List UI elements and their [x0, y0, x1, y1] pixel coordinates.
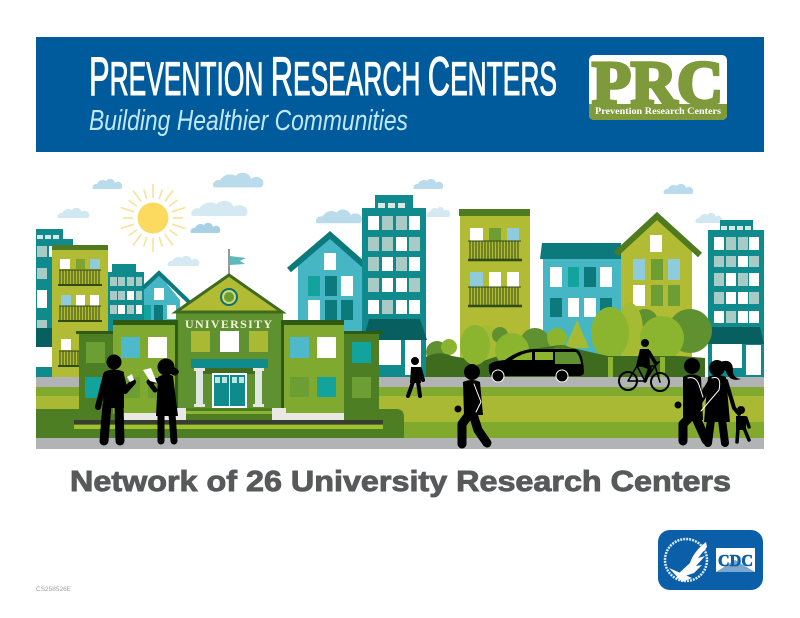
HHS seal	[665, 539, 707, 582]
PRC logo: Prevention Research Centers	[595, 107, 721, 117]
CDC mark: CDC	[718, 551, 753, 570]
side wings	[113, 320, 176, 414]
university building	[74, 275, 383, 429]
small teal building	[108, 264, 144, 332]
network heading: Network of 26 University Research Centers	[70, 466, 731, 498]
olive house	[616, 216, 700, 377]
PRC logo: PRC	[592, 50, 723, 118]
balconies	[468, 241, 522, 306]
olive tall building	[459, 209, 530, 377]
centre block	[176, 312, 283, 418]
tall teal tower	[362, 195, 427, 377]
university label: UNIVERSITY	[185, 317, 272, 331]
CDC HHS logo	[658, 530, 763, 590]
small teal house	[143, 273, 189, 330]
right teal tower	[707, 220, 764, 377]
sky clouds	[58, 173, 722, 266]
large teal house	[289, 235, 364, 340]
teal row house	[540, 243, 621, 377]
flag	[229, 249, 246, 274]
left teal tower	[36, 229, 73, 377]
trees and bushes	[426, 303, 712, 377]
small walker	[408, 357, 423, 396]
person with tablet, right	[143, 358, 179, 441]
walking man	[454, 364, 487, 444]
header banner	[36, 37, 764, 152]
title: PREVENTION RESEARCH CENTERS	[89, 45, 557, 107]
sun	[121, 184, 185, 252]
cyclist	[619, 339, 669, 391]
city illustration	[36, 173, 764, 449]
steps	[186, 408, 272, 411]
person with tablet, left	[98, 354, 134, 441]
balconies	[58, 270, 102, 366]
family walking	[674, 358, 749, 443]
document code: CS258526E	[36, 586, 72, 593]
subtitle: Building Healthier Communities	[89, 105, 408, 137]
olive apartment building left	[52, 245, 108, 377]
ground bands and road	[36, 377, 764, 449]
car	[489, 349, 584, 382]
outer wings	[79, 332, 114, 418]
entrance	[191, 359, 268, 368]
